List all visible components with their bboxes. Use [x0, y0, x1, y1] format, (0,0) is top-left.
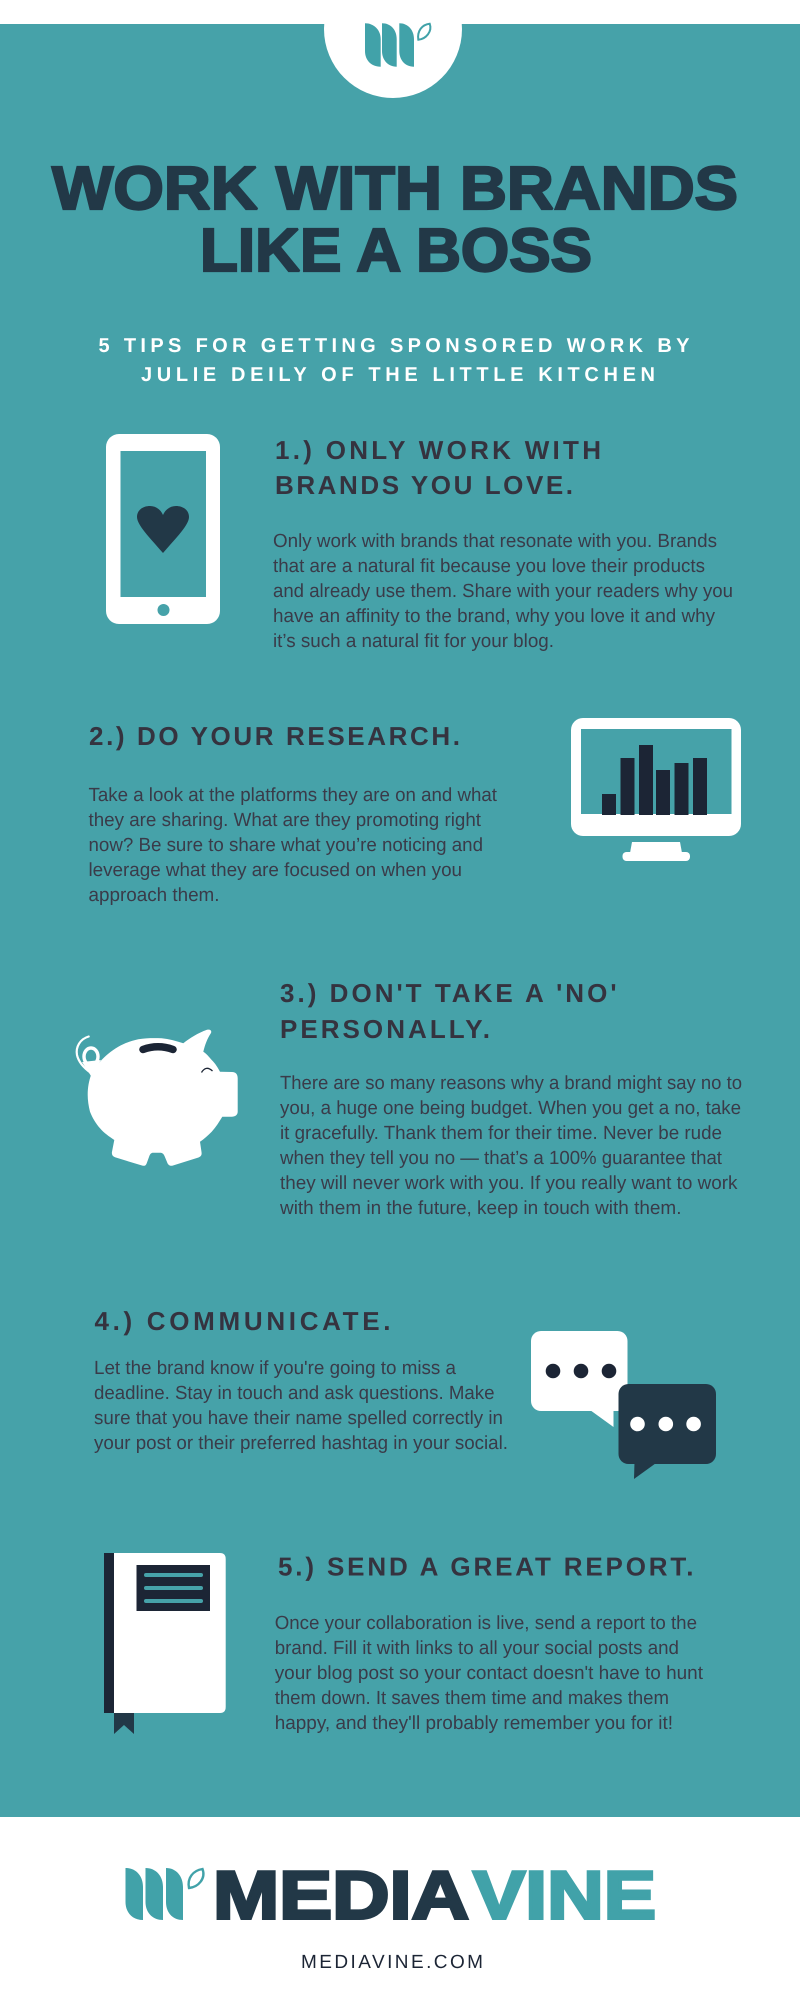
body text: tip 2: Take a look at the platforms they are on and what: [88, 785, 498, 806]
subtitle: [98, 335, 690, 386]
footer wordmark: MEDIA: [213, 1858, 469, 1934]
body text: tip 4: Let the brand know if you're going to miss a: [94, 1358, 456, 1379]
icon: smartphone with heart: [106, 434, 220, 624]
body text: tip 5: [275, 1613, 704, 1734]
body text: tip 1: it’s such a natural fit for your blog.: [273, 631, 554, 652]
panel: tip 1: [106, 434, 733, 652]
heading: tip 4: 4.) COMMUNICATE.: [94, 1306, 390, 1336]
body text: tip 2: [88, 785, 498, 906]
body text: tip 5: Once your collaboration is live, send a report to the: [275, 1613, 697, 1634]
subtitle: 5 TIPS FOR GETTING SPONSORED WORK BY: [98, 335, 690, 357]
heading: tip 1: [275, 435, 601, 500]
panel: tip 5: [104, 1552, 704, 1734]
body text: tip 2: now? Be sure to share what you’re noticing and: [88, 835, 483, 856]
title: LIKE A BOSS: [200, 216, 592, 284]
body text: tip 3: you, a huge one being budget. When you get a no, take: [280, 1098, 741, 1119]
body text: tip 1: [273, 531, 733, 652]
body text: tip 2: approach them.: [88, 885, 220, 906]
heading: tip 3: [280, 978, 616, 1044]
icon: monitor with bar chart: [571, 718, 741, 861]
heading: tip 2: 2.) DO YOUR RESEARCH.: [89, 721, 460, 751]
body text: tip 3: [279, 1073, 742, 1219]
panel: tip 2: [88, 718, 741, 906]
body text: tip 4: sure that you have their name spelled correctly in: [94, 1408, 503, 1429]
body text: tip 3: There are so many reasons why a brand might say no to: [280, 1073, 742, 1094]
heading: tip 1: BRANDS YOU LOVE.: [275, 470, 573, 500]
body text: tip 3: when they tell you no — that’s a 100% guarantee that: [279, 1148, 723, 1169]
panel: tip 4: [94, 1306, 716, 1479]
heading: tip 1: 1.) ONLY WORK WITH: [275, 435, 601, 465]
icon: report book: [104, 1553, 226, 1734]
body text: tip 4: deadline. Stay in touch and ask questions. Make: [94, 1383, 494, 1404]
icon: speech bubbles: [531, 1331, 716, 1479]
body text: tip 3: with them in the future, keep in touch with them.: [279, 1198, 682, 1219]
body text: tip 3: it gracefully. Thank them for their time. Never be rude: [280, 1123, 722, 1144]
title: [52, 154, 738, 284]
body text: tip 1: Only work with brands that resonate with you. Brands: [273, 531, 717, 552]
body text: tip 3: they will never work with you. If you really want to work: [280, 1173, 738, 1194]
logo badge: [324, 0, 462, 98]
body text: tip 5: happy, and they'll probably remember you for it!: [275, 1713, 673, 1734]
subtitle: JULIE DEILY OF THE LITTLE KITCHEN: [141, 364, 655, 386]
body text: tip 5: brand. Fill it with links to all your social posts and: [275, 1638, 679, 1659]
body text: tip 2: leverage what they are focused on when you: [88, 860, 462, 881]
panel: tip 3: [77, 978, 742, 1219]
body text: tip 1: and already use them. Share with your readers why you: [273, 581, 733, 602]
footer url: MEDIAVINE.COM: [301, 1952, 483, 1973]
body text: tip 2: they are sharing. What are they promoting right: [88, 810, 482, 831]
footer wordmark: [213, 1858, 656, 1934]
body text: tip 4: [94, 1358, 508, 1454]
heading: tip 3: PERSONALLY.: [280, 1014, 490, 1044]
body text: tip 1: that are a natural fit because you love their products: [273, 556, 705, 577]
footer logo mark: [126, 1868, 203, 1920]
icon: piggy bank: [77, 1030, 238, 1166]
footer wordmark: VINE: [473, 1858, 656, 1934]
heading: tip 3: 3.) DON'T TAKE A 'NO': [280, 978, 616, 1008]
title: WORK WITH BRANDS: [52, 154, 738, 222]
body text: tip 5: them down. It saves them time and makes them: [275, 1688, 669, 1709]
body text: tip 4: your post or their preferred hashtag in your social.: [94, 1433, 508, 1454]
body text: tip 5: your blog post so your contact doesn't have to hunt: [275, 1663, 704, 1684]
heading: tip 5: 5.) SEND A GREAT REPORT.: [278, 1552, 694, 1582]
body text: tip 1: have an affinity to the brand, why you love it and why: [273, 606, 715, 627]
